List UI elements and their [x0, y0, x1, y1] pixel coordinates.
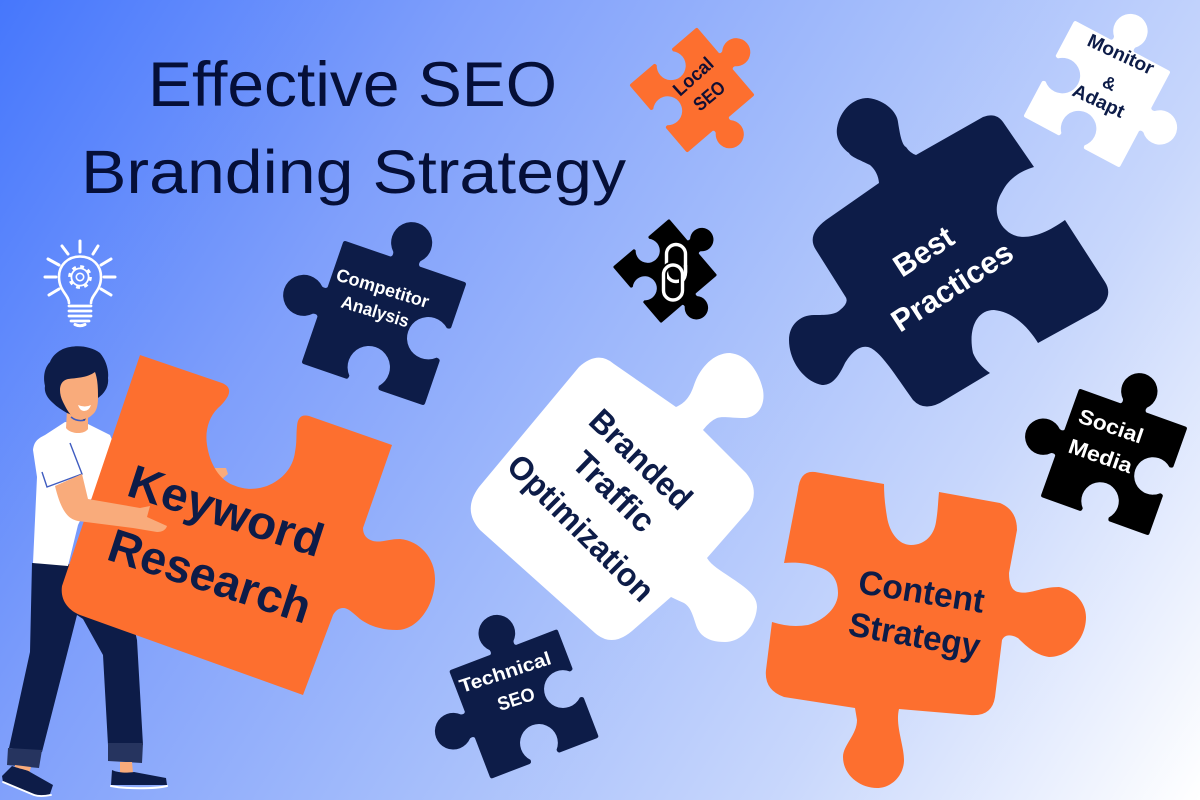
label: Adapt: Adapt	[1069, 80, 1128, 123]
illustration: person back layer	[2, 346, 228, 796]
label: SEO: SEO	[495, 684, 538, 716]
panel: Content Strategy puzzle piece	[766, 472, 1086, 788]
panel: link icon puzzle piece	[613, 204, 750, 341]
label: Traffic: Traffic	[565, 443, 663, 540]
panel: Local SEO puzzle piece	[629, 9, 794, 174]
label: Technical: Technical	[457, 648, 554, 698]
title: Effective SEO	[148, 50, 557, 120]
person arm over piece	[55, 474, 167, 532]
label: Best: Best	[887, 219, 960, 284]
panel: Best Practices puzzle piece	[789, 98, 1108, 406]
person ankles	[14, 762, 133, 774]
title: Branding Strategy	[81, 138, 627, 206]
label: Media: Media	[1065, 435, 1136, 478]
panel: Branded Traffic Optimization puzzle piece	[471, 353, 764, 642]
panel: Technical SEO puzzle piece	[402, 595, 599, 792]
panel: Social Media puzzle piece	[1007, 343, 1200, 536]
person hair	[44, 346, 108, 420]
label: Branded: Branded	[582, 401, 700, 517]
label: Practices: Practices	[885, 234, 1020, 339]
person smile	[78, 405, 91, 411]
person right shoe	[111, 770, 167, 785]
panel: Keyword Research puzzle piece	[62, 355, 435, 695]
panel: Competitor Analysis puzzle piece	[263, 189, 480, 406]
person left shoe sole	[3, 782, 51, 796]
label: Optimization: Optimization	[500, 447, 662, 609]
person collar	[71, 417, 85, 421]
title	[81, 50, 627, 206]
label: Competitor: Competitor	[334, 265, 431, 312]
person right shoe sole	[111, 786, 167, 788]
person shirt	[33, 422, 125, 566]
person neck	[66, 410, 88, 433]
person trouser cuffs	[7, 743, 143, 768]
label: Keyword: Keyword	[122, 454, 330, 567]
icon: light bulb with gear	[45, 241, 115, 326]
person hand behind hole	[215, 468, 228, 479]
label: ampersand: &	[1099, 71, 1120, 95]
label: SEO: SEO	[690, 77, 730, 116]
person face	[60, 372, 98, 419]
label: Local: Local	[669, 54, 718, 101]
panel: Monitor and Adapt puzzle piece	[1023, 0, 1200, 184]
label: Analysis: Analysis	[339, 292, 412, 331]
label: Social: Social	[1075, 405, 1146, 449]
label: Strategy: Strategy	[846, 605, 983, 666]
person sleeve line	[42, 443, 82, 487]
label: Monitor: Monitor	[1084, 30, 1158, 80]
person trousers	[9, 563, 143, 752]
icon: chain link	[664, 244, 686, 300]
label: Content: Content	[856, 563, 987, 621]
person left shoe	[2, 766, 53, 796]
label: Research: Research	[102, 518, 318, 633]
